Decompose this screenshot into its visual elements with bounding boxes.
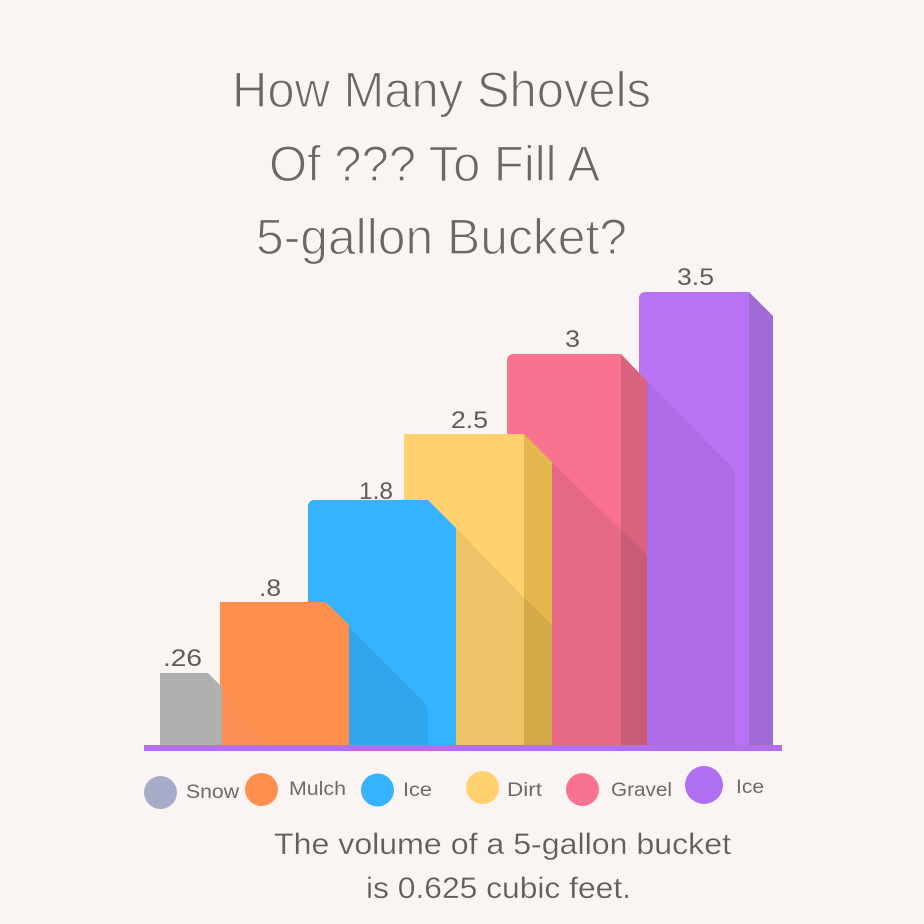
shadow on orange bar <box>222 687 265 745</box>
legend item: Mulch <box>245 773 346 806</box>
value labels: 3 <box>565 326 580 353</box>
value labels: 3.5 <box>677 264 714 291</box>
footnote: The volume of a 5-gallon bucket <box>274 828 732 861</box>
bar: Dirt 2.5 <box>404 434 552 745</box>
legend <box>144 766 764 809</box>
bar: Gravel 3 <box>507 354 647 745</box>
legend item: Gravel: Gravel <box>611 780 672 801</box>
bar: Mulch .8 <box>220 602 349 745</box>
value labels: .8 <box>259 575 281 602</box>
legend item: Gravel <box>566 773 672 806</box>
shadow on yellow bar <box>456 528 552 745</box>
legend item: Dirt <box>466 771 543 804</box>
baseline <box>144 745 782 751</box>
footnote: is 0.625 cubic feet. <box>366 872 631 905</box>
legend item: Ice (purple) <box>685 766 764 804</box>
value labels <box>163 264 714 672</box>
legend item: Ice (purple): Ice <box>736 777 764 798</box>
legend item: Ice <box>361 774 432 806</box>
legend item: Snow <box>144 776 239 809</box>
title: 5-gallon Bucket? <box>256 209 627 265</box>
value label 1.8: 1.8 <box>359 478 393 505</box>
legend item: Ice: Ice <box>403 780 432 801</box>
shadow on purple bar <box>647 381 735 745</box>
bar: Snow .26 <box>160 673 222 745</box>
legend item: Snow: Snow <box>186 782 239 803</box>
legend item: Dirt: Dirt <box>507 780 543 801</box>
bar: Ice 1.8 <box>308 500 456 745</box>
legend item: Mulch: Mulch <box>289 779 346 800</box>
bar chart <box>144 292 782 751</box>
title: Of ??? To Fill A <box>269 136 601 192</box>
shadow on blue bar <box>349 627 428 745</box>
bar: Ice 3.5 <box>639 292 773 745</box>
value labels: 2.5 <box>451 407 488 434</box>
value labels: .26 <box>163 645 202 672</box>
footnote <box>274 828 732 905</box>
shadow on pink bar <box>552 462 647 745</box>
title: How Many Shovels <box>232 62 651 118</box>
title <box>232 62 651 265</box>
